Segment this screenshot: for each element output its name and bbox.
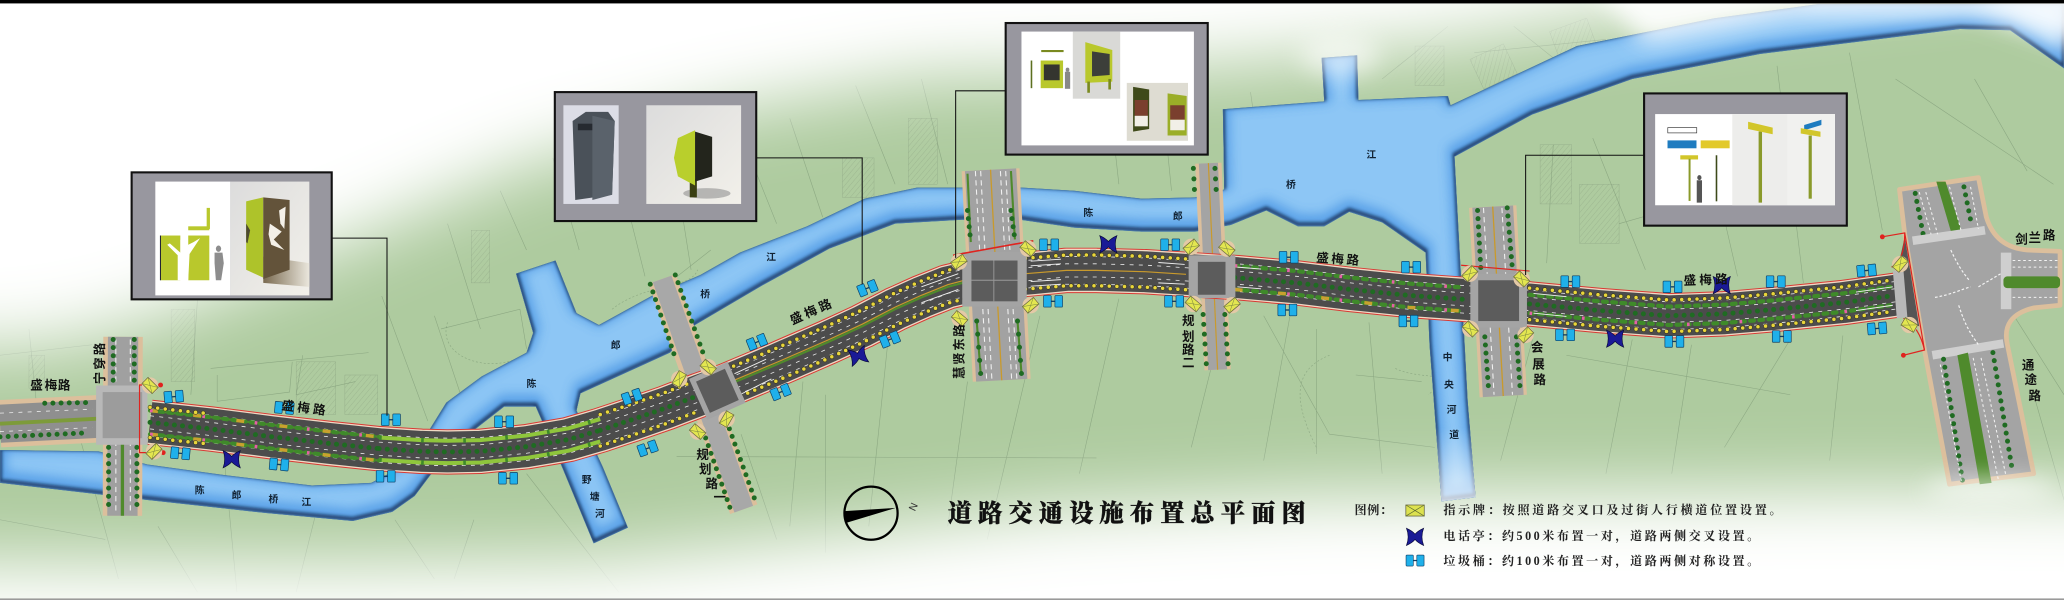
road: Guihua Road 1 (650, 275, 757, 513)
road: Jianlan and Tongtu Roads at the east junction (1899, 178, 2060, 500)
panel: callout 1 tree-shaped sign (132, 172, 332, 299)
notice board elevation (1031, 50, 1070, 89)
icon: sign (1019, 294, 1042, 317)
road label: west Shengmei Road: 盛梅路 (30, 377, 71, 392)
legend text: sign: 指示牌：按照道路交叉口及过街人行横道位置设置。 (1443, 502, 1782, 517)
icon: trash bin (1279, 251, 1298, 263)
legend icon: trash bin (1406, 555, 1424, 566)
legend heading: 图例： (1354, 502, 1393, 517)
icon: trash bin (376, 471, 395, 482)
road: Huixian East Road (968, 170, 1021, 380)
water label: central canal: 中央河道 (1443, 351, 1459, 441)
road section: diagonal section to Huixian East Road (727, 265, 968, 402)
icon: sign (1510, 267, 1533, 290)
icon: sign (1017, 237, 1040, 260)
panel: junctions (96, 237, 1919, 445)
fade: canal bottom end (1436, 432, 1476, 502)
icon: sign (715, 408, 738, 430)
icon: trash bin (274, 401, 294, 414)
water label: Yetang River: 野塘河 (582, 473, 605, 520)
icon: phone booth (1100, 236, 1117, 253)
3d street sign (1748, 122, 1773, 203)
junction: Huixian East Road (962, 252, 1027, 307)
panel: trash bin icons along road (164, 239, 1887, 484)
icon: trash bin (1165, 296, 1184, 307)
icon: trash bin (1665, 336, 1684, 347)
road label: Guihua Road 1: 规划路一 (696, 448, 726, 504)
icon: north compass (844, 487, 921, 540)
road label: Jianlan Road: 剑兰路 (2015, 227, 2056, 246)
road label: Shengmei Road middle: 盛梅路 (1316, 250, 1362, 268)
icon: sign (1459, 317, 1482, 340)
junction: Guihua Road 2 (1189, 255, 1235, 298)
icon: trash bin (621, 388, 643, 405)
icon: north compass: N (907, 501, 921, 513)
icon: trash bin (746, 333, 768, 351)
panel: phone booth icons (223, 236, 1730, 468)
legend text: trash bin: 垃圾桶：约100米布置一对，道路两侧对称设置。 (1443, 553, 1759, 568)
icon: trash bin (1556, 329, 1575, 341)
sign 3d view (246, 197, 309, 287)
icon: trash bin (637, 440, 659, 457)
icon: trash bin (1278, 304, 1297, 316)
legend text: phone booth: 电话亭：约500米布置一对，道路两侧交叉设置。 (1443, 528, 1759, 543)
icon: trash bin (495, 416, 514, 428)
fade: top right river (1566, 0, 2064, 59)
icon: trash bin (1044, 296, 1063, 307)
callout connector: bin to road (757, 158, 862, 284)
panel: legend (1354, 502, 1782, 568)
water label: lower river: 陈郎桥江 (195, 483, 311, 508)
icon: sign (1221, 294, 1244, 317)
road section: Huixian East Road to Guihua Road 2 (1025, 255, 1186, 290)
road label: Shengmei Road: 盛梅路 (281, 397, 330, 418)
junction: Huizhan Road (1470, 274, 1527, 328)
red control lines at junctions (140, 233, 1924, 454)
road label: Huizhan Road: 会展路 (1531, 339, 1547, 387)
bottom grey border (0, 598, 2064, 600)
road section: east belts (1530, 280, 1890, 332)
icon: sign (1898, 314, 1920, 336)
icon: sign (1215, 237, 1238, 260)
sign design drawing (1668, 128, 1730, 203)
sign elevation (160, 208, 224, 280)
road: Guihua Road 2 (1193, 163, 1228, 370)
panel: road and water labels (30, 148, 2056, 520)
panel: callout 2 trash bins (555, 92, 756, 221)
icon: trash bin (1766, 276, 1785, 287)
tree-shaped bin (674, 130, 731, 199)
grey bin (573, 112, 615, 200)
icon: sign (1458, 262, 1481, 285)
road: west spur of Shengmei Road (0, 403, 105, 437)
title: 道路交通设施布置总平面图 (948, 500, 1306, 528)
icon: trash bin (1857, 264, 1876, 277)
icon: sign (948, 250, 970, 273)
icon: trash bin (1399, 315, 1418, 327)
icon: trash bin (170, 447, 190, 460)
junction: Guihua Road 1 (689, 362, 746, 420)
icon: trash bin (1040, 239, 1059, 251)
notice board 3d (1085, 42, 1112, 93)
icon: phone booth (223, 451, 240, 468)
icon: trash bin (499, 472, 518, 484)
3d double street sign (1801, 120, 1821, 199)
icon: sign (668, 368, 690, 390)
icon: trash bin (381, 414, 400, 426)
icon: sign (1180, 235, 1203, 258)
legend icon: sign (1406, 505, 1424, 516)
road: Huizhan Road (1478, 207, 1520, 396)
road: Ningchuan Road (109, 337, 137, 516)
road label: Guihua Road 2: 规划路二 (1182, 314, 1195, 370)
icon: trash bin (1867, 322, 1887, 335)
road: Shengmei Road main carriageway (150, 255, 1899, 466)
road section: planted belts over river (1235, 266, 1464, 311)
stop-line markings near junctions (735, 259, 1893, 395)
road label: Ningchuan Road: 宁穿路 (92, 341, 107, 384)
icon: phone booth (848, 345, 869, 366)
road section: yellow-dot trees before Guihua Road 1 (600, 379, 700, 446)
icon: sign (948, 307, 971, 330)
top black border (0, 0, 2064, 3)
fade: river stub (1301, 34, 1380, 76)
icon: sign (142, 440, 166, 463)
icon: sign (1514, 323, 1537, 346)
icon: trash bin (879, 331, 901, 348)
icon: phone booth (1713, 277, 1730, 294)
callout connector: tree sign to road (332, 238, 387, 416)
icon: trash bin (770, 383, 792, 401)
icon: trash bin (1161, 239, 1180, 251)
road label: Shengmei Road east: 盛梅路 (1683, 271, 1731, 288)
icon: trash bin (1772, 331, 1791, 342)
junction: Ningchuan Road (96, 386, 147, 445)
panel: callout 4 street name signs (1644, 93, 1847, 226)
icon: trash bin (269, 458, 289, 471)
icon: sign (1889, 253, 1912, 276)
road label: Tongtu Road: 通途路 (2022, 358, 2041, 403)
road label: Huixian East Road: 慧贤东路 (952, 323, 967, 379)
panel: cross roads (0, 163, 2060, 516)
legend icon: phone booth (1406, 528, 1424, 545)
icon: trash bin (1402, 261, 1421, 273)
panel: signage icons at junction corners (139, 235, 1920, 463)
poster boards (1133, 87, 1187, 136)
callout connector: street sign to road (1526, 155, 1644, 275)
panel: callout 3 notice boards (1006, 23, 1208, 155)
icon: trash bin (857, 279, 878, 297)
water label: river junction: 陈郎桥江 (527, 251, 776, 390)
junction: east dark wedge (1893, 237, 1919, 326)
icon: sign (697, 356, 720, 379)
icon: trash bin (1663, 281, 1682, 293)
water label: central river: 陈郎桥江 (1083, 148, 1376, 223)
road section: west planted belts (150, 407, 379, 461)
icon: sign (686, 420, 709, 443)
icon: trash bin (164, 390, 184, 403)
icon: trash bin (1561, 276, 1580, 287)
road label: Shengmei Road diagonal: 盛梅路 (787, 294, 837, 327)
road section: lime belts over river (379, 419, 600, 463)
icon: sign (139, 374, 162, 397)
callout connector: notice board to road (956, 91, 1006, 258)
icon: sign (1182, 292, 1205, 315)
icon: phone booth (1607, 330, 1624, 347)
